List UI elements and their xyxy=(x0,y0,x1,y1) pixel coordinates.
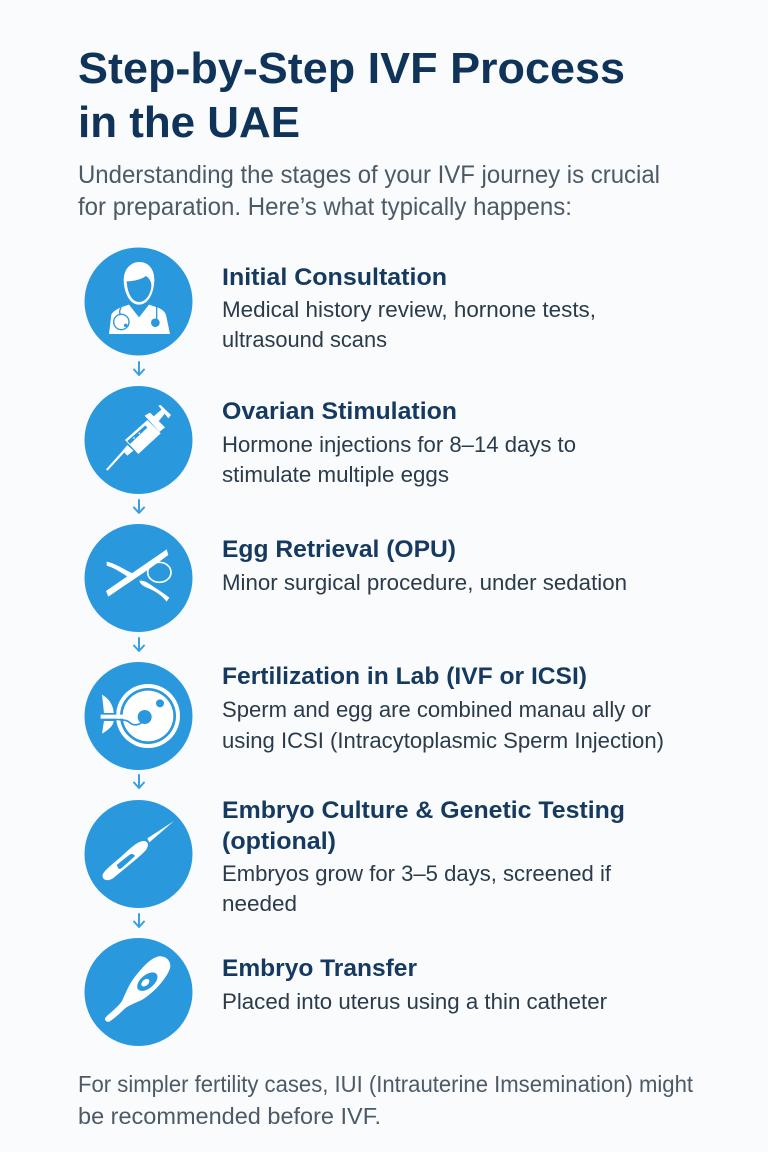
step 3: egg retrieval xyxy=(84,524,627,632)
description xyxy=(222,297,596,352)
arrow xyxy=(134,500,144,513)
description: Sperm and egg are combined manau ally or xyxy=(222,697,651,722)
description xyxy=(222,697,664,753)
step 1: initial consultation xyxy=(84,248,596,356)
step 6: embryo transfer xyxy=(84,938,607,1046)
title: Step-by-Step IVF Process xyxy=(78,44,625,93)
description: using ICSI (Intracytoplasmic Sperm Injection) xyxy=(222,728,664,753)
footer note xyxy=(78,1071,694,1129)
intro text: Understanding the stages of your IVF journey is crucial xyxy=(78,161,660,189)
description: Minor surgical procedure, under sedation xyxy=(222,570,627,595)
description: Hormone injections for 8–14 days to xyxy=(222,432,576,457)
arrow xyxy=(134,775,144,788)
arrow xyxy=(134,638,144,651)
intro text xyxy=(78,161,660,221)
step 2: ovarian stimulation xyxy=(84,386,576,494)
heading: Embryo Culture & Genetic Testing xyxy=(222,797,625,824)
description: Medical history review, hornone tests, xyxy=(222,297,596,322)
icon: egg and pipette xyxy=(84,662,192,770)
description xyxy=(222,432,576,487)
icon: doctor xyxy=(84,248,192,356)
arrow xyxy=(134,362,144,375)
description: Embryos grow for 3–5 days, screened if xyxy=(222,861,612,886)
heading: Embryo Transfer xyxy=(222,955,417,982)
icon: catheter xyxy=(84,938,192,1046)
icon: syringe xyxy=(84,386,192,494)
title: in the UAE xyxy=(78,98,300,147)
heading: Initial Consultation xyxy=(222,264,447,291)
footer note: For simpler fertility cases, IUI (Intrauterine Imsemination) might xyxy=(78,1071,694,1097)
step 5: embryo culture xyxy=(84,797,625,916)
intro text: for preparation. Here’s what typically happens: xyxy=(78,193,572,221)
heading: (optional) xyxy=(222,828,336,855)
step 4: fertilization xyxy=(84,662,664,770)
description xyxy=(222,861,612,916)
heading: Ovarian Stimulation xyxy=(222,398,457,425)
description: ultrasound scans xyxy=(222,327,387,352)
description: needed xyxy=(222,891,297,916)
title xyxy=(78,44,625,147)
icon: pipette xyxy=(84,800,192,908)
icon: retrieval instrument xyxy=(84,524,192,632)
heading: Egg Retrieval (OPU) xyxy=(222,536,456,563)
heading: Fertilization in Lab (IVF or ICSI) xyxy=(222,663,587,690)
footer note: be recommended before IVF. xyxy=(78,1103,381,1129)
description: stimulate multiple eggs xyxy=(222,462,449,487)
heading xyxy=(222,797,625,855)
arrow xyxy=(134,914,144,927)
description: Placed into uterus using a thin catheter xyxy=(222,989,607,1014)
